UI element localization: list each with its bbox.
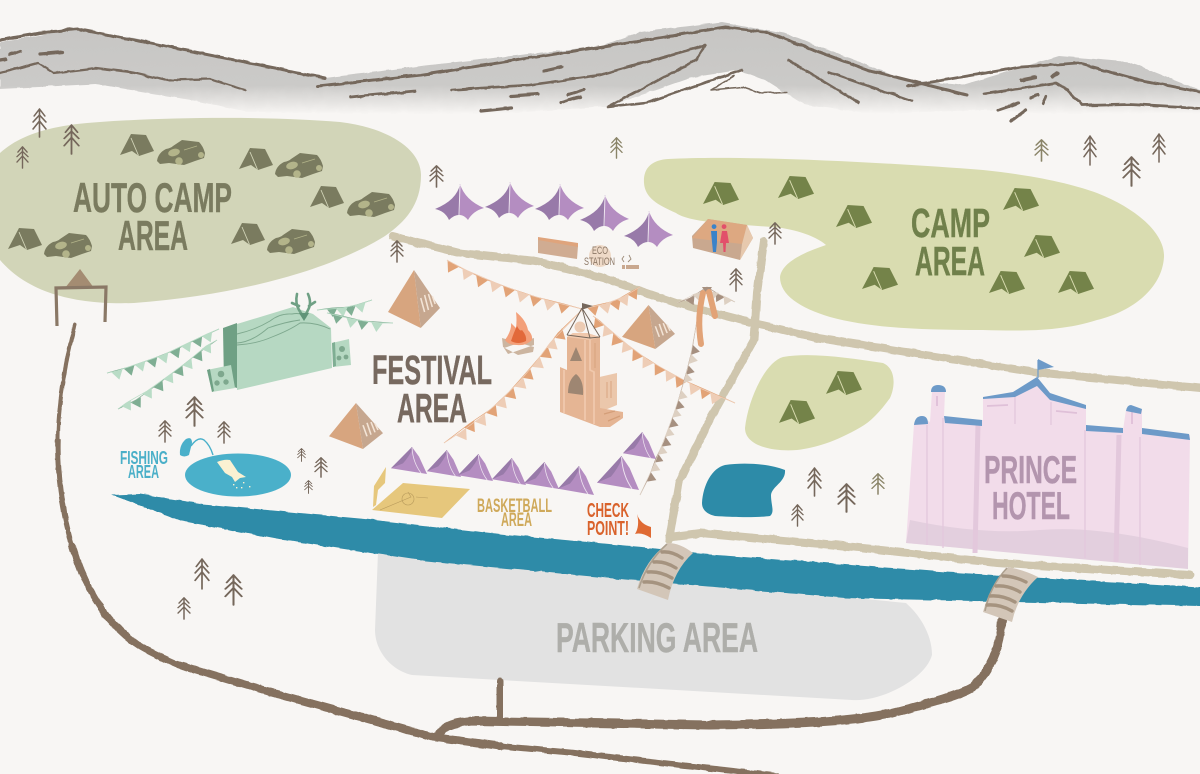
icons: purple tents row	[391, 432, 656, 495]
mountains	[0, 22, 1200, 121]
panel: camp area	[644, 158, 1164, 331]
icons: small camp tents	[779, 371, 862, 424]
icon: hotel flag	[1038, 359, 1054, 378]
bunting: brown flags	[640, 287, 735, 495]
label: basketball area: BASKETBALL	[477, 496, 552, 517]
stage	[207, 294, 351, 392]
icon: antlers	[292, 294, 315, 321]
icons: purple marquee row top	[435, 182, 673, 247]
fishing area	[120, 438, 291, 496]
bunting: green flags	[107, 300, 393, 409]
panel: prince hotel	[906, 359, 1190, 569]
icon: bridge west	[637, 543, 693, 600]
label: basketball area: AREA	[501, 510, 532, 531]
icon: bridge east	[983, 567, 1038, 622]
panel: auto camp area	[0, 118, 421, 303]
icon: tower flag	[582, 303, 593, 309]
pond	[702, 464, 785, 517]
parking area	[375, 552, 932, 700]
eco station	[538, 237, 639, 269]
label: fishing area: AREA	[128, 462, 159, 482]
roads: brown paths	[58, 325, 1002, 774]
icon: check point marker	[635, 514, 651, 538]
icon: fish	[217, 460, 246, 482]
icon: eco sign	[622, 255, 639, 269]
roads: beige paths	[392, 236, 1200, 575]
heading: festival area: AREA	[397, 385, 467, 431]
heading: auto camp area: AUTO CAMP	[73, 174, 232, 221]
label: fishing area: FISHING	[120, 448, 168, 468]
icon: right speaker	[332, 339, 351, 367]
heading: prince hotel: HOTEL	[992, 485, 1070, 528]
heading: prince hotel: PRINCE	[984, 449, 1077, 492]
check point	[587, 500, 651, 540]
heading: camp area: CAMP	[911, 200, 990, 246]
bunting: festival flags	[444, 260, 735, 443]
pyramid tents	[329, 270, 675, 449]
icon: fisher	[180, 438, 213, 456]
check point: POINT!	[587, 518, 629, 540]
panel: small camp	[745, 355, 894, 450]
river	[112, 494, 1200, 606]
heading: festival area: FESTIVAL	[372, 347, 492, 393]
icons: auto camp tents	[8, 134, 344, 250]
heading: parking area: PARKING AREA	[556, 614, 758, 661]
main tower	[560, 303, 623, 427]
icon: hoop	[373, 467, 386, 507]
toilet building	[692, 219, 753, 260]
icon: woman	[720, 224, 729, 252]
icon: entrance gate	[56, 269, 106, 326]
icon: man	[711, 224, 717, 252]
check point: CHECK	[587, 500, 629, 522]
icons: trees	[17, 109, 1165, 619]
basketball court	[372, 467, 552, 531]
heading: auto camp area: AREA	[118, 212, 188, 259]
icon: campfire	[502, 312, 534, 355]
icons: camp tents	[703, 176, 1094, 294]
icons: auto camp cars	[44, 140, 395, 258]
icon: left speaker	[207, 365, 235, 392]
label: eco station: STATION	[584, 256, 615, 268]
heading: camp area: AREA	[915, 238, 985, 284]
label: eco station: ECO	[592, 245, 608, 257]
